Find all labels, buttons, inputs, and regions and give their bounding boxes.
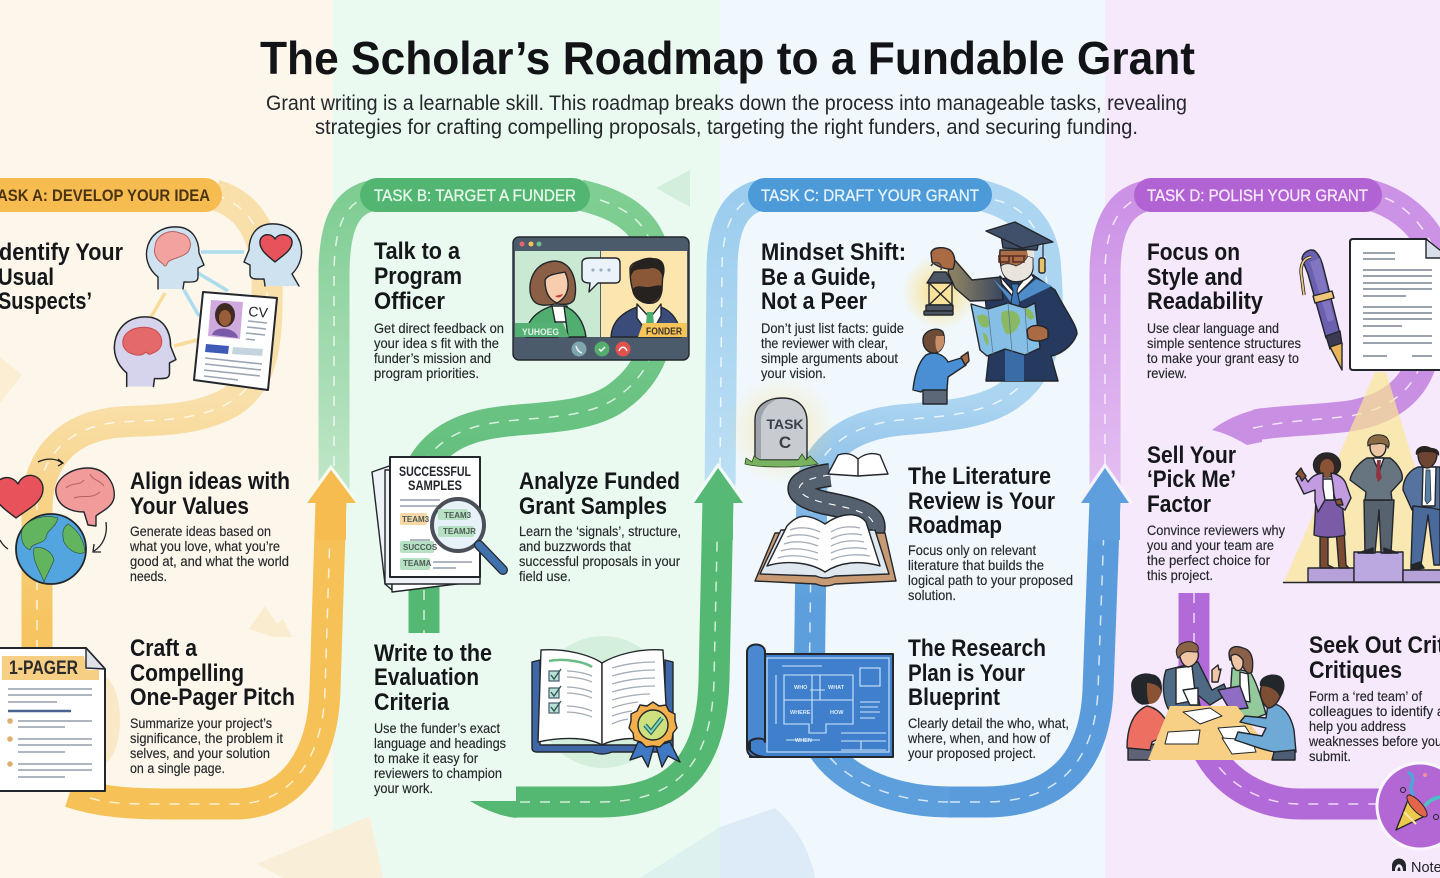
icon: heart, brain and globe bbox=[0, 459, 114, 584]
woman in red bbox=[1127, 674, 1184, 760]
text: Write to the Evaluation Criteria: reviewers to champion bbox=[374, 765, 502, 781]
graduation cap bbox=[986, 222, 1053, 273]
text: Sell Your Pick Me Factor: the perfect choice for bbox=[1147, 552, 1270, 568]
text: Align ideas with Your Values: Generate ideas based on bbox=[130, 523, 271, 539]
text: Focus on Style and Readability: Readability bbox=[1147, 288, 1264, 315]
icon: successful samples with magnifier: SUCCESSFUL bbox=[399, 464, 471, 479]
head with brain bbox=[146, 227, 204, 289]
text: Write to the Evaluation Criteria: language and headings bbox=[374, 735, 506, 751]
text: Analyze Funded Grant Samples: and buzzwords that bbox=[519, 538, 631, 554]
text: Align ideas with Your Values: needs. bbox=[130, 568, 167, 584]
rosette bbox=[629, 702, 680, 767]
text: Align ideas with Your Values: Your Values bbox=[130, 493, 249, 520]
road: task B green path bbox=[334, 195, 718, 818]
text: Analyze Funded Grant Samples bbox=[519, 468, 681, 584]
text: Seek Out Critical Critiques bbox=[1308, 632, 1440, 764]
icon: blueprint: WHO bbox=[794, 685, 808, 691]
robe bbox=[985, 275, 1077, 381]
text: The Literature Review is Your Roadmap: logical path to your proposed bbox=[908, 572, 1073, 588]
pill: task D bbox=[1134, 178, 1382, 212]
icon: blueprint bbox=[747, 644, 893, 757]
subtitle: strategies for crafting compelling proposals, targeting the right funders, and securing funding. bbox=[315, 116, 1138, 139]
text: Align ideas with Your Values: what you love, what you’re bbox=[129, 538, 280, 554]
speech bubble bbox=[582, 258, 620, 292]
text: Analyze Funded Grant Samples: Learn the ‘signals’, structure, bbox=[519, 523, 681, 539]
text: Align ideas with Your Values bbox=[129, 468, 290, 584]
CV card bbox=[194, 292, 277, 390]
icon: open book with checklist and rosette bbox=[532, 636, 680, 768]
pill: task B: TASK B: TARGET A FUNDER bbox=[374, 186, 576, 205]
icon: document bbox=[1350, 239, 1440, 370]
text: Sell Your Pick Me Factor: you and your team are bbox=[1147, 537, 1274, 553]
text: Write to the Evaluation Criteria: Use the funder’s exact bbox=[374, 720, 500, 736]
text: The Research Plan is Your Blueprint: Plan is Your bbox=[908, 660, 1025, 687]
man in blue-grey jacket bbox=[1163, 642, 1228, 712]
text: Seek Out Critical Critiques: Form a ‘red team’ of bbox=[1309, 688, 1422, 704]
icon: successful samples with magnifier: TEAM3 bbox=[444, 511, 472, 520]
text: Analyze Funded Grant Samples: field use. bbox=[519, 568, 571, 584]
label: YUHOEG bbox=[515, 323, 569, 338]
icon: winding road through open book bbox=[755, 454, 896, 586]
icon: party popper badge bbox=[1377, 763, 1440, 849]
subtitle bbox=[266, 92, 1187, 139]
icon: professor with lantern and map, child bbox=[902, 222, 1077, 404]
road: task D purple path bbox=[1105, 195, 1438, 804]
pill: task C: TASK C: DRAFT YOUR GRANT bbox=[761, 186, 979, 205]
map bbox=[971, 303, 1040, 356]
logo: NotebookLM bbox=[1392, 858, 1440, 876]
text: Sell Your Pick Me Factor bbox=[1147, 442, 1285, 583]
road: task A orange path bbox=[37, 195, 331, 804]
icon: successful samples with magnifier: SAMPLES bbox=[408, 478, 462, 493]
text: Talk to a Program Officer: funder’s mission and bbox=[374, 350, 491, 366]
woman in purple bbox=[1296, 453, 1351, 568]
text: Focus on Style and Readability: to make your grant easy to bbox=[1147, 350, 1299, 366]
text: Talk to a Program Officer: program priorities. bbox=[374, 365, 479, 381]
text: Focus on Style and Readability: review. bbox=[1147, 365, 1187, 381]
text: Craft a Compelling One-Pager Pitch: Summarize your project’s bbox=[130, 715, 272, 731]
icon: 1-pager document: 1-PAGER bbox=[9, 658, 78, 679]
text: Talk to a Program Officer: your idea s fit with the bbox=[374, 335, 499, 351]
heading: Identify Your Usual Suspects: Suspects’ bbox=[0, 288, 92, 315]
text: Mindset Shift: Don’t just list facts: guide bbox=[761, 320, 904, 336]
icon: Task C tombstone bbox=[726, 375, 836, 485]
label: FONDER: FONDER bbox=[646, 326, 683, 338]
head with red brain bbox=[114, 317, 176, 386]
text: Mindset Shift: simple arguments about bbox=[761, 350, 898, 366]
text: Focus on Style and Readability: Style and bbox=[1147, 264, 1243, 291]
text: Analyze Funded Grant Samples: Analyze Funded bbox=[519, 468, 680, 495]
label: FONDER bbox=[638, 323, 687, 338]
table with papers bbox=[1148, 706, 1277, 760]
hand and lantern bbox=[924, 248, 955, 315]
man in blue shirt bbox=[1235, 674, 1296, 760]
head with heart bbox=[244, 224, 302, 286]
text: The Research Plan is Your Blueprint: your proposed project. bbox=[908, 745, 1036, 761]
raised arm bbox=[948, 258, 1003, 301]
woman on call bbox=[526, 261, 586, 337]
text: Craft a Compelling One-Pager Pitch bbox=[130, 635, 295, 776]
text: The Research Plan is Your Blueprint bbox=[907, 635, 1069, 761]
text: Craft a Compelling One-Pager Pitch: selves, and your solution bbox=[130, 745, 270, 761]
text: Craft a Compelling One-Pager Pitch: One-Pager Pitch bbox=[130, 684, 295, 711]
text: Write to the Evaluation Criteria: Criteria bbox=[374, 689, 450, 716]
text: Seek Out Critical Critiques: Critiques bbox=[1309, 657, 1402, 684]
text: Sell Your Pick Me Factor: Factor bbox=[1147, 491, 1211, 518]
arrow: task C to task D bbox=[1079, 466, 1131, 540]
text: Sell Your Pick Me Factor: this project. bbox=[1147, 567, 1213, 583]
text: Talk to a Program Officer: Talk to a bbox=[374, 238, 461, 265]
text: Write to the Evaluation Criteria: to make it easy for bbox=[374, 750, 478, 766]
pill: task C bbox=[748, 178, 992, 212]
icon: network of heads and CV bbox=[114, 224, 302, 390]
label: YUHOEG: YUHOEG bbox=[522, 327, 559, 338]
text: The Literature Review is Your Roadmap: Review is Your bbox=[908, 488, 1055, 515]
text: Align ideas with Your Values: good at, and what the world bbox=[130, 553, 289, 569]
text: Sell Your Pick Me Factor: ‘Pick Me’ bbox=[1147, 466, 1236, 493]
man in grey suit bbox=[1350, 435, 1402, 553]
text: The Literature Review is Your Roadmap: Roadmap bbox=[908, 512, 1002, 539]
man on call bbox=[611, 258, 681, 337]
text: The Literature Review is Your Roadmap: The Literature bbox=[908, 463, 1051, 490]
icon: fountain pen bbox=[1301, 250, 1342, 370]
title: The Scholar’s Roadmap to a Fundable Grant bbox=[260, 32, 1195, 84]
text: The Research Plan is Your Blueprint: The Research bbox=[908, 635, 1046, 662]
text: Seek Out Critical Critiques: submit. bbox=[1309, 748, 1351, 764]
text: Talk to a Program Officer: Officer bbox=[374, 288, 445, 315]
text: Write to the Evaluation Criteria: Evaluation bbox=[374, 664, 479, 691]
icon: Task C tombstone: C bbox=[779, 433, 791, 452]
text: The Research Plan is Your Blueprint: Blueprint bbox=[908, 684, 1000, 711]
icon: successful samples with magnifier: SUCCOS bbox=[403, 543, 438, 552]
text: Write to the Evaluation Criteria bbox=[374, 640, 506, 796]
text: The Research Plan is Your Blueprint: Clearly detail the who, what, bbox=[908, 715, 1069, 731]
text: Write to the Evaluation Criteria: your work. bbox=[374, 780, 433, 796]
panel: task B bbox=[360, 178, 689, 796]
icon: successful samples with magnifier bbox=[372, 457, 503, 592]
head bbox=[998, 246, 1034, 282]
panel: task C bbox=[726, 178, 1077, 761]
text: The Research Plan is Your Blueprint: where, when, and how of bbox=[907, 730, 1050, 746]
call buttons bbox=[572, 342, 630, 356]
text: Mindset Shift: Mindset Shift: bbox=[761, 239, 906, 266]
man in blue suit bbox=[1403, 446, 1440, 570]
text: Focus on Style and Readability: simple sentence structures bbox=[1147, 335, 1301, 351]
text: Focus on Style and Readability bbox=[1147, 239, 1301, 381]
pill: task A bbox=[0, 178, 222, 212]
text: The Literature Review is Your Roadmap: solution. bbox=[908, 587, 956, 603]
text: Talk to a Program Officer: Program bbox=[374, 263, 462, 290]
text: Seek Out Critical Critiques: help you address bbox=[1309, 718, 1406, 734]
arrow: task A to task B bbox=[305, 468, 357, 540]
text: Mindset Shift: Be a Guide, bbox=[761, 264, 876, 291]
text: Mindset Shift: the reviewer with clear, bbox=[761, 335, 888, 351]
text: Craft a Compelling One-Pager Pitch: on a single page. bbox=[130, 760, 225, 776]
road: task C blue path bbox=[720, 195, 1105, 802]
text: Sell Your Pick Me Factor: Sell Your bbox=[1147, 442, 1236, 469]
CV card: CV bbox=[248, 303, 269, 321]
icon: blueprint: WHAT bbox=[828, 685, 845, 691]
icon: blueprint: WHEN bbox=[795, 738, 812, 744]
arrow: task B to task C bbox=[692, 466, 745, 540]
text: Mindset Shift: your vision. bbox=[761, 365, 826, 381]
text: Talk to a Program Officer: Get direct feedback on bbox=[374, 320, 504, 336]
text: Align ideas with Your Values: Align ideas with bbox=[130, 468, 290, 495]
text: Mindset Shift: Not a Peer bbox=[761, 288, 867, 315]
pill: task B bbox=[360, 178, 590, 212]
child bbox=[913, 329, 969, 404]
icon: successful samples with magnifier: TEAM3 bbox=[402, 515, 430, 524]
text: The Literature Review is Your Roadmap bbox=[908, 463, 1073, 603]
icon: blueprint: HOW bbox=[830, 710, 844, 716]
icon: blueprint: WHERE bbox=[790, 710, 811, 716]
text: Craft a Compelling One-Pager Pitch: Compelling bbox=[130, 660, 244, 687]
icon: 1-pager document bbox=[0, 648, 120, 791]
text: Focus on Style and Readability: Use clear language and bbox=[1147, 320, 1279, 336]
text: Analyze Funded Grant Samples: Grant Samples bbox=[519, 493, 667, 520]
text: Talk to a Program Officer bbox=[374, 238, 504, 381]
icon: Task C tombstone: TASK bbox=[766, 416, 804, 432]
icon: team meeting around a table bbox=[1127, 642, 1296, 760]
text: Focus on Style and Readability: Focus on bbox=[1147, 239, 1240, 266]
text: The Literature Review is Your Roadmap: Focus only on relevant bbox=[908, 542, 1036, 558]
text: Craft a Compelling One-Pager Pitch: Craft a bbox=[130, 635, 198, 662]
icon: successful samples with magnifier: TEAMJR bbox=[443, 527, 476, 536]
woman in green bbox=[1218, 647, 1266, 722]
text: Mindset Shift bbox=[761, 239, 906, 381]
text: Write to the Evaluation Criteria: Write to the bbox=[374, 640, 492, 667]
icon: video call window bbox=[513, 237, 689, 360]
panel: task D bbox=[1127, 178, 1440, 876]
pill: task D: TASK D: POLISH YOUR GRANT bbox=[1147, 186, 1368, 205]
text: The Literature Review is Your Roadmap: literature that builds the bbox=[908, 557, 1044, 573]
icon: three people on podium with spotlight bbox=[1283, 372, 1440, 582]
subtitle: Grant writing is a learnable skill. This roadmap breaks down the process into manageable tasks, revealing bbox=[266, 92, 1187, 115]
heading: Identify Your Usual Suspects bbox=[0, 239, 123, 315]
podium bbox=[1283, 552, 1440, 582]
icon: successful samples with magnifier: TEAMA bbox=[403, 559, 432, 568]
text: Analyze Funded Grant Samples: successful proposals in your bbox=[519, 553, 680, 569]
panel: task A bbox=[0, 178, 302, 791]
text: Sell Your Pick Me Factor: Convince reviewers why bbox=[1147, 522, 1285, 538]
text: Craft a Compelling One-Pager Pitch: significance, the problem it bbox=[130, 730, 283, 746]
